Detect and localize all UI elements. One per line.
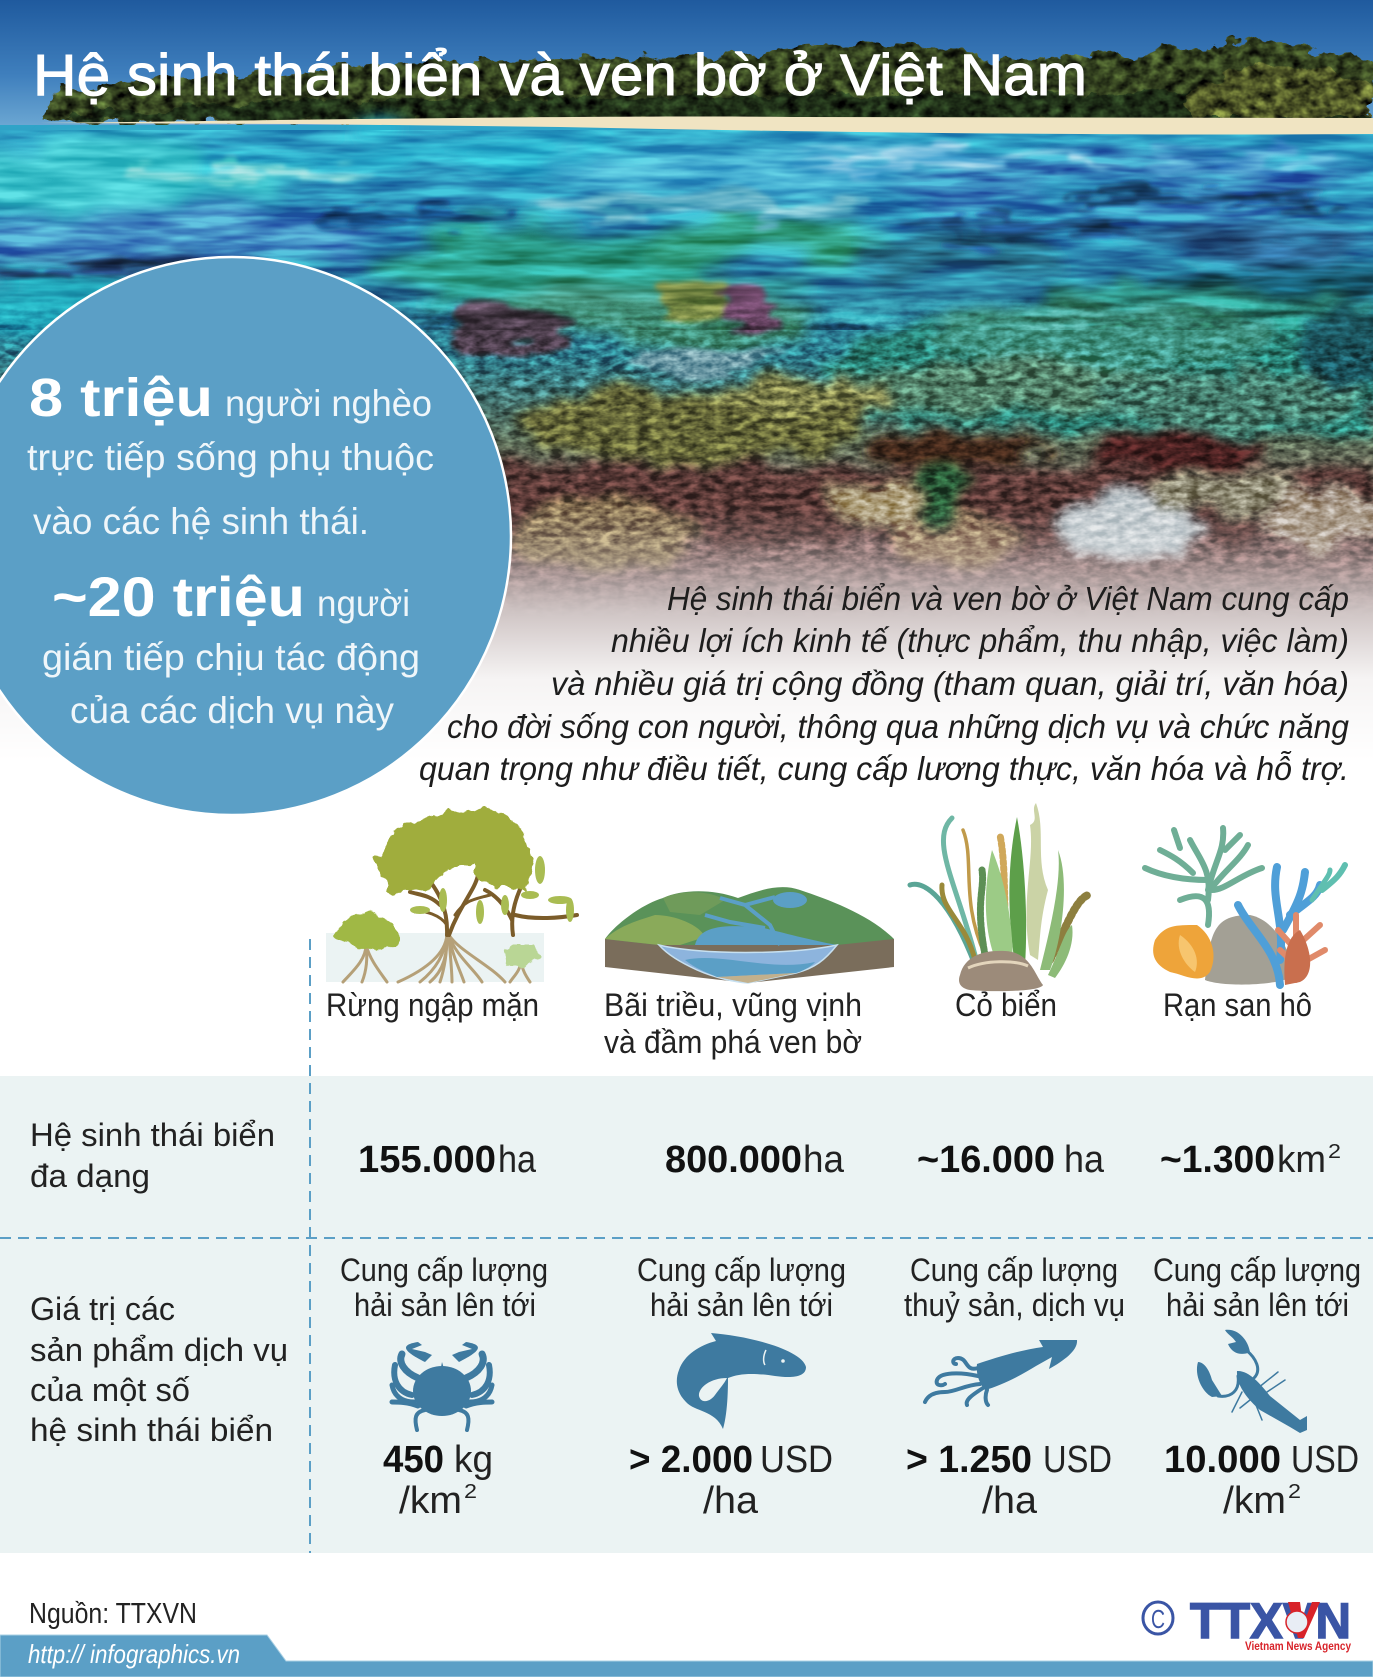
value: tidal flats area: ha <box>803 1139 845 1181</box>
column: seagrass value <box>904 1252 1125 1522</box>
row heading: value of products and services: của một số <box>30 1372 190 1408</box>
value: coral reef area: ~1.300 <box>1160 1139 1275 1181</box>
background photo: island, sea and coral reef <box>0 0 1373 760</box>
stat text line 6: của các dịch vụ này <box>70 690 394 731</box>
table band background <box>0 1076 1373 1553</box>
source: Nguồn: TTXVN <box>29 1598 197 1630</box>
red V and globe <box>1286 1602 1320 1638</box>
sea base <box>0 125 1373 760</box>
label: seagrass: Cỏ biển <box>955 987 1057 1023</box>
rock <box>959 951 1043 991</box>
vertical dashed divider <box>309 939 311 1553</box>
sandy beach <box>40 117 1373 135</box>
column: tidal flats value: hải sản lên tới <box>650 1287 833 1323</box>
column: mangrove value: Cung cấp lượng <box>340 1252 548 1288</box>
row heading: diverse marine ecosystems <box>30 1117 275 1194</box>
value: mangrove area: 155.000 <box>358 1139 496 1181</box>
fade to white <box>0 505 1373 760</box>
website url: http:// infographics.vn <box>28 1639 240 1669</box>
sky <box>0 0 1373 125</box>
icon: fish <box>677 1333 806 1429</box>
column: coral reef value: USD <box>1291 1439 1359 1481</box>
column: mangrove value: hải sản lên tới <box>354 1287 536 1323</box>
intro paragraph: và nhiều giá trị cộng đồng (tham quan, giải trí, văn hóa) <box>551 665 1349 702</box>
row heading: value of products and services <box>30 1291 288 1448</box>
stat: 20 million: ~20 triệu <box>52 565 305 628</box>
label: coral reef: Rạn san hô <box>1163 987 1312 1023</box>
label: mangrove: Rừng ngập mặn <box>326 987 539 1023</box>
icon: lobster <box>1197 1330 1307 1433</box>
value: coral reef area <box>1160 1139 1341 1181</box>
island tree line <box>40 38 1373 128</box>
value: tidal flats area: 800.000 <box>665 1139 802 1181</box>
row heading: value of products and services: hệ sinh thái biển <box>30 1412 273 1448</box>
column: mangrove value: kg <box>454 1439 493 1481</box>
value: seagrass area: ~16.000 <box>917 1139 1055 1181</box>
row heading: value of products and services: sản phẩm dịch vụ <box>30 1332 288 1368</box>
label: tidal flats and lagoons <box>604 987 862 1060</box>
row heading: diverse marine ecosystems: đa dạng <box>30 1158 150 1194</box>
icon: tidal flats and lagoons <box>605 887 894 983</box>
value: seagrass area: ha <box>1064 1139 1105 1181</box>
column: coral reef value: 10.000 <box>1164 1439 1281 1481</box>
column: tidal flats value: /ha <box>703 1480 759 1522</box>
intro paragraph <box>419 580 1350 787</box>
stat text line 2: trực tiếp sống phụ thuộc <box>27 437 434 478</box>
column: coral reef value: 2 <box>1288 1481 1301 1503</box>
icon: coral reef <box>1145 828 1345 985</box>
horizontal dashed divider <box>0 1237 1373 1239</box>
value: coral reef area: 2 <box>1328 1141 1341 1163</box>
wordmark: TTXVN <box>1190 1593 1351 1649</box>
orange sponge <box>1153 925 1214 979</box>
intro paragraph: Hệ sinh thái biển và ven bờ ở Việt Nam cung cấp <box>667 580 1349 617</box>
column: mangrove value <box>340 1252 548 1522</box>
sea surface patches <box>0 142 1373 350</box>
icon: seagrass <box>910 803 1088 991</box>
icon: crab <box>392 1342 492 1430</box>
title: Hệ sinh thái biển và ven bờ ở Việt Nam <box>33 43 1087 108</box>
column: seagrass value: USD <box>1043 1439 1112 1481</box>
column: coral reef value <box>1153 1252 1361 1522</box>
value: coral reef area: km <box>1277 1139 1326 1181</box>
copyright symbol: C <box>1151 1604 1165 1634</box>
column: tidal flats value: Cung cấp lượng <box>637 1252 846 1288</box>
icon: squid <box>925 1340 1077 1405</box>
stat text line 5: gián tiếp chịu tác động <box>42 637 420 678</box>
label: tidal flats and lagoons: Bãi triều, vũng vịnh <box>604 987 862 1023</box>
sea streaks <box>0 154 1350 367</box>
intro paragraph: nhiều lợi ích kinh tế (thực phẩm, thu nhập, việc làm) <box>611 622 1349 659</box>
intro paragraph: cho đời sống con người, thông qua những dịch vụ và chức năng <box>447 708 1350 745</box>
column: mangrove value: 450 <box>383 1439 444 1481</box>
column: seagrass value: > 1.250 <box>906 1439 1032 1481</box>
circle background <box>0 257 511 815</box>
column: mangrove value: /km <box>399 1480 462 1522</box>
reef texture <box>0 290 1373 620</box>
intro paragraph: quan trọng như điều tiết, cung cấp lương thực, văn hóa và hỗ trợ. <box>419 750 1349 787</box>
label: tidal flats and lagoons: và đầm phá ven bờ <box>604 1024 862 1060</box>
icon: mangrove forest <box>326 808 577 982</box>
value: mangrove area: ha <box>498 1139 537 1181</box>
column: coral reef value: hải sản lên tới <box>1166 1287 1349 1323</box>
row heading: diverse marine ecosystems: Hệ sinh thái biển <box>30 1117 275 1153</box>
column: coral reef value: /km <box>1223 1480 1286 1522</box>
footer bar <box>0 1635 1373 1677</box>
column: seagrass value: Cung cấp lượng <box>910 1252 1118 1288</box>
stat text line 3: vào các hệ sinh thái. <box>33 501 369 542</box>
sea texture <box>0 130 1373 330</box>
column: tidal flats value: USD <box>760 1439 833 1481</box>
stat: 8 million: 8 triệu <box>29 368 213 428</box>
agency name: Vietnam News Agency <box>1245 1639 1351 1653</box>
TTXVN logo <box>1143 1593 1351 1653</box>
column: seagrass value: /ha <box>982 1480 1038 1522</box>
column: tidal flats value <box>629 1252 846 1522</box>
row heading: value of products and services: Giá trị các <box>30 1291 175 1327</box>
reef corals <box>500 285 1373 571</box>
copyright symbol <box>1143 1602 1173 1634</box>
circle panel: people depending on ecosystems <box>0 257 511 815</box>
column: mangrove value: 2 <box>464 1481 477 1503</box>
column: seagrass value: thuỷ sản, dịch vụ <box>904 1287 1125 1323</box>
stat text line 4: người <box>317 583 410 624</box>
stat text line 1: người nghèo <box>225 383 432 424</box>
column: tidal flats value: > 2.000 <box>629 1439 753 1481</box>
